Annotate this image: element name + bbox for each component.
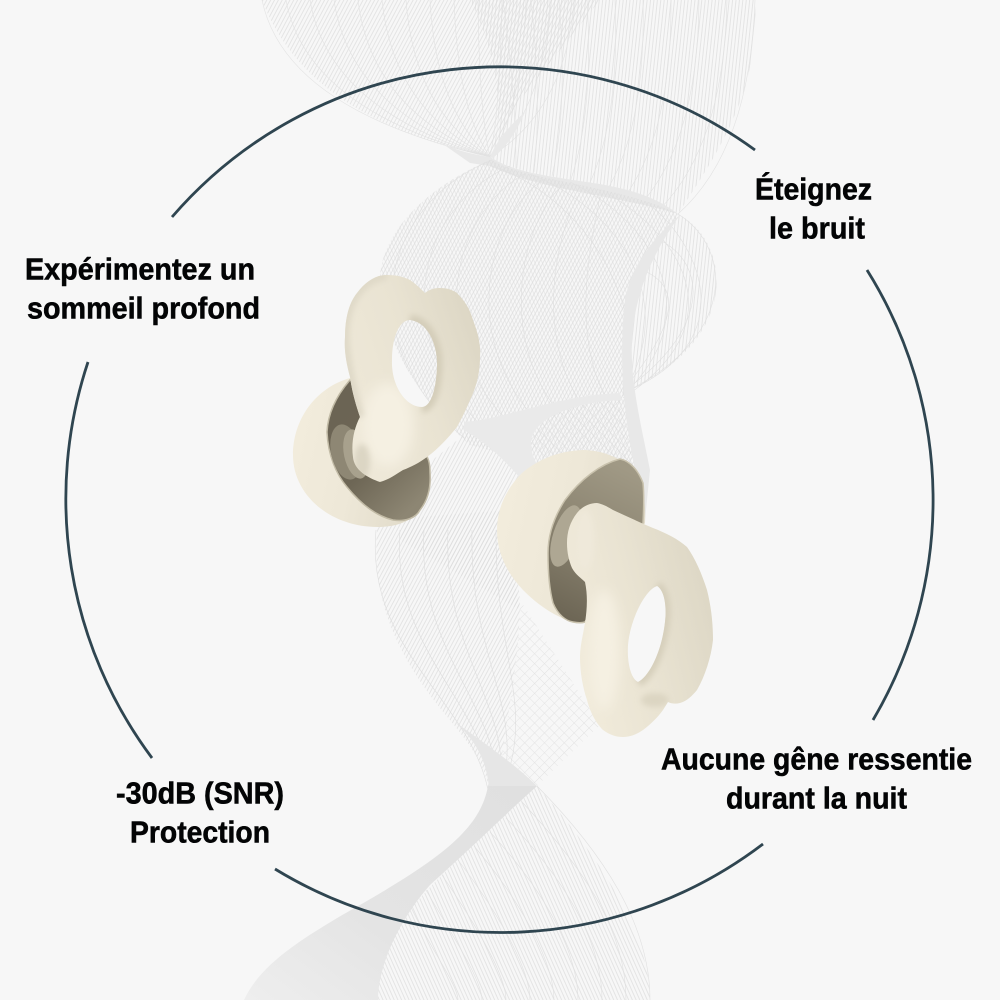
dome interior [327,380,430,521]
arc: bottom [275,844,763,932]
label: Expérimentez un sommeil profond: Expérimentez un [25,252,255,286]
wave: top lobe [262,0,755,214]
label: Aucune gêne ressentie durant la nuit [661,742,972,816]
dome tip [497,450,645,623]
label: Éteignez le bruit: Éteignez [755,172,872,206]
decorative sound wave mesh [244,0,755,1000]
stem base [544,502,588,570]
stem base inner [339,427,373,481]
ear loop [567,503,713,737]
label: Éteignez le bruit: le bruit [769,210,865,246]
right earbud [497,450,713,737]
loop shading [345,275,437,480]
label: Aucune gêne ressentie durant la nuit: Aucune gêne ressentie [661,742,972,776]
label: Aucune gêne ressentie durant la nuit: durant la nuit [726,780,907,816]
left earbud [293,275,480,527]
arc: right [867,270,933,720]
label: -30dB (SNR) Protection: Protection [130,814,270,850]
label: Expérimentez un sommeil profond [25,252,260,326]
ear loop [345,275,480,482]
loop shading [593,584,671,707]
wave: lower lobe [375,510,600,830]
arc: top [172,67,755,217]
wave: lower left band [244,786,537,1000]
arc: left [66,362,152,758]
dome tip [293,378,429,527]
label: -30dB (SNR) Protection: -30dB (SNR) [116,776,284,810]
stem base [326,421,366,483]
wave: lower right lobe [378,786,650,1000]
label: Éteignez le bruit [755,172,872,246]
circular arc ring [66,67,933,932]
dome interior [548,459,644,623]
label: Expérimentez un sommeil profond: sommeil profond [27,290,260,326]
label: -30dB (SNR) Protection [116,776,284,850]
wave: middle lobe [380,160,717,610]
